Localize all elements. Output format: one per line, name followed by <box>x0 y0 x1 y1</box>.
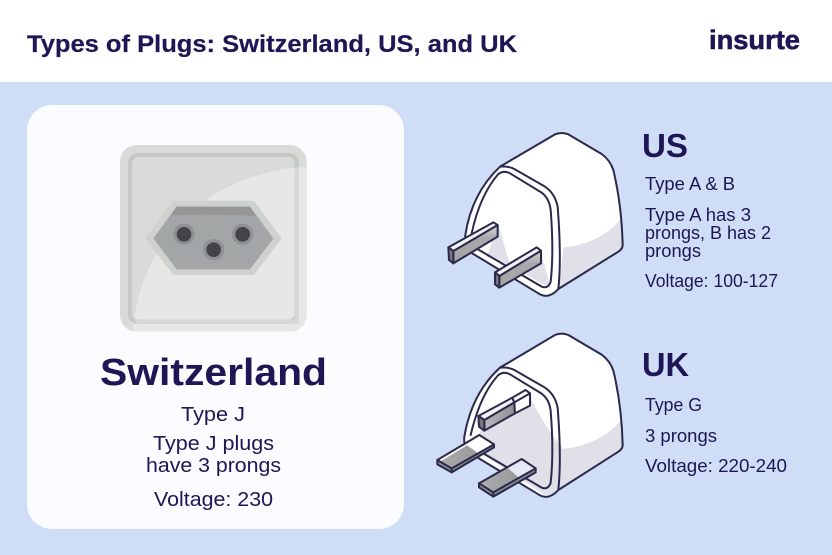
text: UK voltage: Voltage: 220-240 <box>645 455 787 476</box>
illustration: UK plug <box>437 334 623 497</box>
icon: Swiss socket <box>120 145 307 332</box>
heading: UK: UK <box>642 347 689 384</box>
prong: left blade <box>437 435 494 472</box>
prong: earth <box>478 390 530 431</box>
prong: right <box>495 247 541 288</box>
text: UK description: 3 prongs <box>645 425 717 446</box>
title: Types of Plugs: Switzerland, US, and UK <box>27 31 518 58</box>
illustration: US plug <box>448 133 627 296</box>
text: US description: prongs <box>645 240 701 261</box>
panel: Switzerland <box>27 105 404 529</box>
text: US type: Type A & B <box>645 173 735 194</box>
text: US voltage: Voltage: 100-127 <box>645 270 778 291</box>
header bar <box>0 0 832 82</box>
text: Type J description: Type J plugs <box>153 433 274 455</box>
text: Type J description: have 3 prongs <box>146 455 281 477</box>
prong: left <box>448 222 498 263</box>
logo: insurte: insurte <box>709 25 800 55</box>
text: US description: prongs, B has 2 <box>645 222 771 243</box>
prong: right blade <box>479 459 536 497</box>
text: UK type: Type G <box>645 394 702 415</box>
heading: Switzerland: Switzerland <box>100 352 327 394</box>
text: Type J: Type J <box>181 404 245 426</box>
text: US description: Type A has 3 <box>645 204 751 225</box>
text: Swiss voltage: Voltage: 230 <box>154 489 273 511</box>
heading: US: US <box>642 128 688 165</box>
